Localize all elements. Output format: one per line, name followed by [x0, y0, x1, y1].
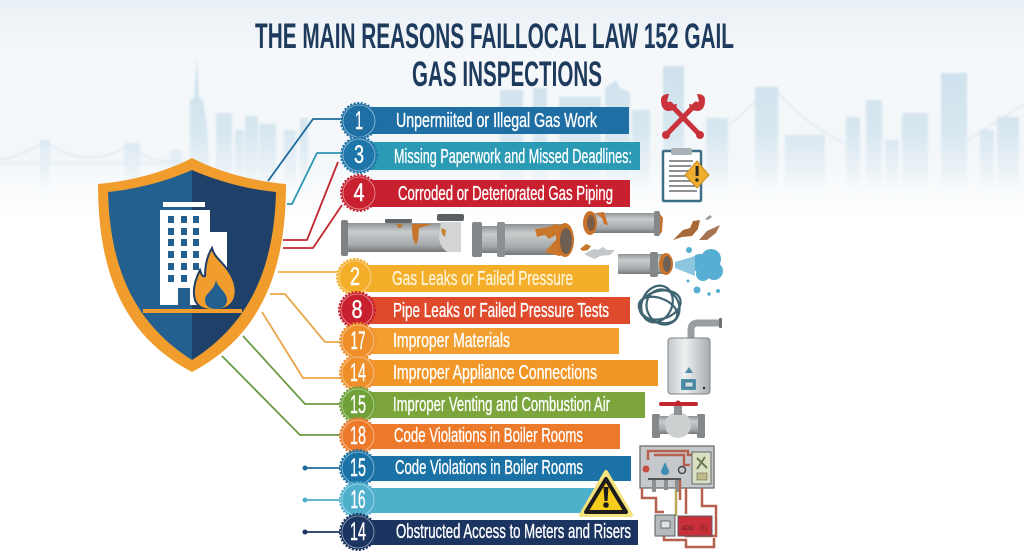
icon: water heater: [668, 318, 722, 394]
item 14 orange: [340, 356, 658, 390]
icon: boiler control diagram: ADD: [681, 526, 694, 532]
item 8: 8: [352, 296, 362, 324]
item 17: 17: [350, 327, 366, 355]
icon: gas valve: [652, 400, 705, 438]
item 4: 4: [354, 179, 365, 207]
item 16: 16: [350, 486, 366, 514]
icon: boiler control diagram: (T): [700, 526, 708, 532]
gas cloud: [675, 247, 723, 296]
item 3: [342, 138, 640, 172]
item 14 orange: Improper Appliance Connections: [393, 362, 597, 384]
item 15 green: 15: [350, 391, 366, 419]
item 18: Code Violations in Boiler Rooms: [394, 425, 583, 447]
item 1: Unpermiited or Illegal Gas Work: [396, 110, 598, 132]
metal fragments: [673, 215, 720, 240]
item 15 green: Improper Venting and Combustion Air: [393, 394, 610, 416]
pipes illustration: [341, 211, 723, 296]
item 3: 3: [354, 141, 364, 169]
item 17: [340, 324, 619, 358]
title: GAS INSPECTIONS: [412, 55, 602, 94]
title: [255, 17, 734, 94]
leaking pipe: [618, 252, 673, 277]
bars and labels: [338, 104, 658, 550]
item 14 navy: [340, 514, 638, 550]
icon: flame: [194, 248, 236, 310]
item 14 navy: Obstructed Access to Meters and Risers: [396, 521, 631, 543]
item 15 blue: [340, 450, 631, 486]
upper right pipe: [583, 211, 663, 236]
item 1: 1: [355, 107, 363, 135]
item 3: Missing Paperwork and Missed Deadlines:: [394, 146, 632, 168]
broken pipe: [472, 222, 615, 259]
icon: boiler control diagram: [640, 446, 716, 547]
connector lines: [222, 119, 342, 534]
corroded pipe with elbow: [341, 214, 464, 256]
item 8: [340, 292, 630, 328]
item 17: Improper Materials: [393, 330, 510, 352]
icon: building: [160, 202, 227, 305]
icon: crossed wrenches: [661, 94, 705, 139]
item 16: [340, 482, 600, 518]
icon: warning triangle: [581, 472, 631, 515]
item 14 navy: 14: [350, 518, 366, 546]
shield emblem: [98, 158, 286, 372]
icon: clipboard warning: [663, 148, 709, 201]
item 1: [342, 104, 629, 138]
item 4: [342, 176, 630, 210]
city skyline: [0, 57, 1024, 195]
item 15 blue: 15: [350, 454, 366, 482]
item 4: Corroded or Deteriorated Gas Piping: [398, 183, 613, 205]
item 15 blue: Code Violations in Boiler Rooms: [395, 457, 583, 479]
item 2: [338, 260, 609, 294]
item 8: Pipe Leaks or Failed Pressure Tests: [393, 300, 609, 322]
item 2: 2: [350, 263, 360, 291]
icon: coiled hose: [635, 280, 686, 331]
item 2: Gas Leaks or Failed Pressure: [392, 268, 573, 290]
item 15 green: [340, 388, 645, 422]
item 18: [340, 418, 620, 454]
item 18: 18: [350, 422, 366, 450]
item 14 orange: 14: [350, 359, 366, 387]
